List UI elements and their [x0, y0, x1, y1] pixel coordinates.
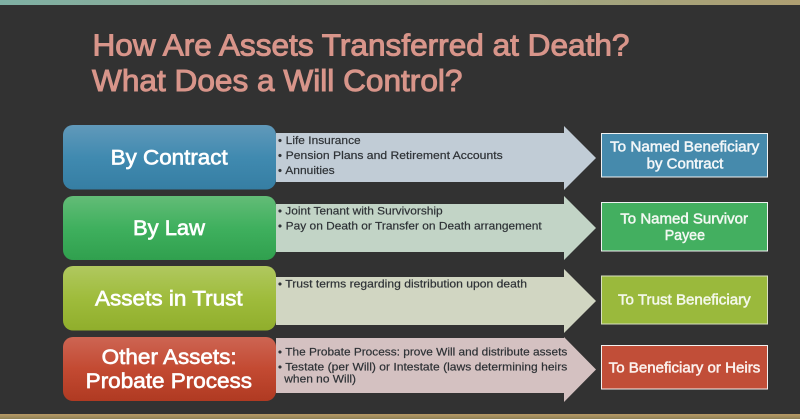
arrow: probate items: The Probate Process: prove Will and distribute assets	[285, 347, 568, 359]
destination box: named survivor payee: To Named Survivor	[620, 211, 748, 227]
bottom decorative band	[0, 414, 800, 419]
arrow: contract items: •	[278, 150, 282, 162]
arrow: law items: •	[278, 220, 282, 232]
title	[92, 28, 630, 98]
category box: by law: By Law	[133, 216, 205, 240]
destination box: named survivor payee	[602, 202, 768, 251]
top decorative band	[0, 0, 800, 5]
arrow: trust items: Trust terms regarding distribution upon death	[285, 279, 527, 291]
arrow: contract items: Pension Plans and Retirement Accounts	[286, 150, 503, 162]
category box: assets in trust	[63, 266, 276, 330]
category box: by contract	[63, 125, 276, 190]
destination box: named beneficiary by contract: To Named Beneficiary	[610, 140, 760, 156]
destination box: trust beneficiary: To Trust Beneficiary	[618, 293, 751, 309]
arrow: contract items: Annuities	[285, 165, 335, 177]
arrow: contract items	[276, 126, 596, 190]
row: by law	[63, 196, 768, 260]
destination box: named beneficiary by contract: by Contract	[647, 156, 723, 172]
category box: by contract: By Contract	[111, 146, 228, 170]
row: other assets, probate process	[63, 337, 768, 402]
arrow: probate items: •	[278, 347, 282, 359]
category box: by law	[63, 196, 276, 260]
arrow: trust items	[276, 269, 596, 333]
arrow: probate items: •	[278, 362, 282, 374]
title: How Are Assets Transferred at Death?	[92, 28, 630, 63]
arrow: law items: •	[278, 205, 282, 217]
arrow: contract items: •	[278, 165, 282, 177]
destination box: beneficiary or heirs: To Beneficiary or Heirs	[609, 360, 760, 376]
row: by contract	[63, 125, 768, 190]
arrow: contract items: •	[278, 135, 282, 147]
arrow: probate items	[276, 337, 596, 402]
arrow: contract items: Life Insurance	[286, 135, 361, 147]
destination box: named survivor payee: Payee	[665, 228, 705, 244]
arrow: probate items: Testate (per Will) or Intestate (laws determining heirs	[285, 362, 568, 374]
destination box: named beneficiary by contract	[602, 134, 768, 177]
arrow: trust items: •	[278, 279, 282, 291]
category box: other assets: Other Assets:	[102, 345, 237, 369]
category box: other assets: Probate Process	[86, 369, 252, 393]
arrow: law items: Joint Tenant with Survivorship	[285, 205, 443, 217]
destination box: trust beneficiary	[602, 276, 768, 324]
arrow: probate items: when no Will)	[283, 374, 356, 386]
arrow: law items: Pay on Death or Transfer on Death arrangement	[286, 220, 543, 232]
arrow: law items	[276, 196, 596, 260]
category box: assets in trust: Assets in Trust	[95, 287, 243, 311]
title: What Does a Will Control?	[92, 63, 462, 98]
row: assets in trust	[63, 266, 768, 333]
category box: other assets	[63, 337, 276, 401]
destination box: beneficiary or heirs	[602, 346, 768, 389]
